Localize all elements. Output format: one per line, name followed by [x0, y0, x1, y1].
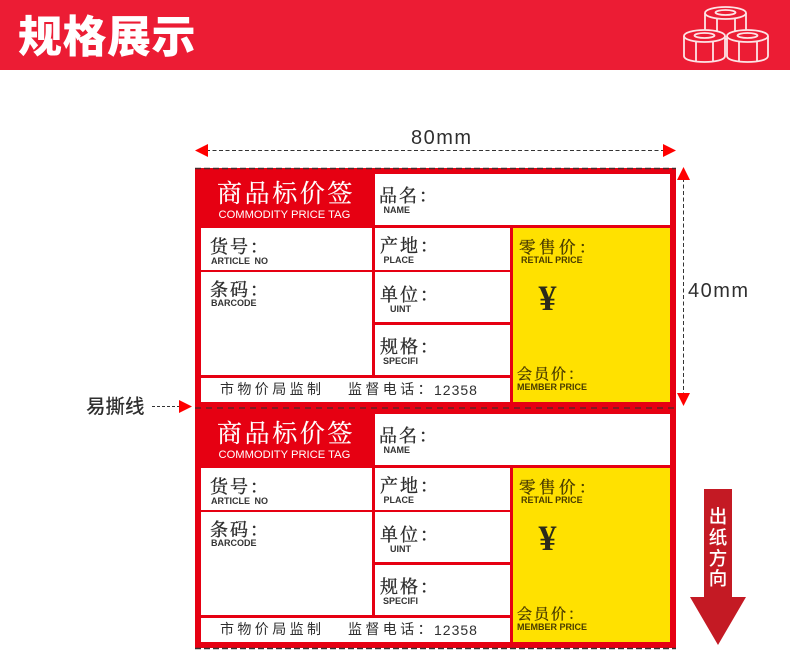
dimension arrow: width 80mm [195, 127, 676, 157]
member price: 会员价： [517, 366, 585, 383]
tag heading: COMMODITY PRICE TAG [218, 209, 350, 221]
retail price: RETAIL PRICE [521, 255, 583, 265]
paper direction arrow: 向 [709, 568, 727, 589]
field: name [379, 186, 439, 215]
supervision line: 12358 [434, 382, 478, 398]
header banner [0, 0, 790, 70]
label: 40mm: 40mm [688, 280, 750, 302]
field: place: 产地： [380, 236, 440, 256]
supervision line: 12358 [434, 622, 478, 638]
member price [517, 366, 587, 392]
member price: 会员价： [517, 606, 585, 623]
retail price: ¥ [538, 278, 556, 318]
field: article no [210, 477, 270, 506]
field: place [380, 476, 440, 505]
member price: MEMBER PRICE [517, 622, 587, 632]
field: article no [210, 237, 270, 266]
tag heading: 商品标价签 [217, 180, 355, 208]
retail price: 零售价： [519, 238, 599, 257]
field: unit [380, 285, 440, 314]
supervision line: 监督电话： [348, 621, 435, 637]
tag heading [217, 180, 355, 221]
field: article no: ARTICLE NO [211, 496, 268, 506]
field: spec [380, 337, 440, 366]
field: name: 品名： [379, 426, 439, 446]
retail price: RETAIL PRICE [521, 495, 583, 505]
field: name: NAME [384, 205, 410, 215]
dimension arrow: height 40mm [677, 167, 750, 406]
label: 80mm: 80mm [411, 127, 473, 149]
field: barcode: BARCODE [211, 538, 257, 548]
field: spec: SPECIFI [383, 356, 418, 366]
field: spec: SPECIFI [383, 596, 418, 606]
tag heading: 商品标价签 [217, 420, 355, 448]
paper direction arrow: 出 [709, 506, 727, 527]
paper direction arrow: 纸 [709, 527, 727, 548]
field: barcode: 条码： [210, 280, 270, 300]
supervision line [220, 621, 478, 638]
field: place: PLACE [384, 255, 414, 265]
field: unit: UINT [390, 304, 411, 314]
retail price [519, 238, 599, 318]
retail price: 零售价： [519, 478, 599, 497]
retail price: ¥ [538, 518, 556, 558]
field: name [379, 426, 439, 455]
paper direction arrow [690, 489, 746, 645]
field: article no: 货号： [210, 237, 270, 257]
tag heading [217, 420, 355, 461]
field: barcode: 条码： [210, 520, 270, 540]
supervision line: 监督电话： [348, 381, 435, 397]
field: place: PLACE [384, 495, 414, 505]
supervision line: 市物价局监制 [220, 381, 324, 397]
field: spec: 规格： [380, 577, 440, 597]
tear line callout [86, 396, 192, 418]
field: name: NAME [384, 445, 410, 455]
icon: label rolls [684, 7, 768, 62]
title: 规格展示 [18, 13, 196, 62]
field: unit [380, 525, 440, 554]
field: unit: UINT [390, 544, 411, 554]
panel: price tag 2 [195, 408, 676, 648]
field: unit: 单位： [380, 285, 440, 305]
field: barcode: BARCODE [211, 298, 257, 308]
supervision line: 市物价局监制 [220, 621, 324, 637]
retail price [519, 478, 599, 558]
field: unit: 单位： [380, 525, 440, 545]
field: article no: ARTICLE NO [211, 256, 268, 266]
field: spec [380, 577, 440, 606]
member price: MEMBER PRICE [517, 382, 587, 392]
member price [517, 606, 587, 632]
supervision line [220, 381, 478, 398]
field: name: 品名： [379, 186, 439, 206]
field: place [380, 236, 440, 265]
paper direction arrow: 方 [709, 548, 727, 569]
field: article no: 货号： [210, 477, 270, 497]
tag heading: COMMODITY PRICE TAG [218, 449, 350, 461]
tear line callout: 易撕线 [86, 396, 145, 418]
panel: price tag 1 [195, 168, 676, 408]
field: place: 产地： [380, 476, 440, 496]
field: spec: 规格： [380, 337, 440, 357]
